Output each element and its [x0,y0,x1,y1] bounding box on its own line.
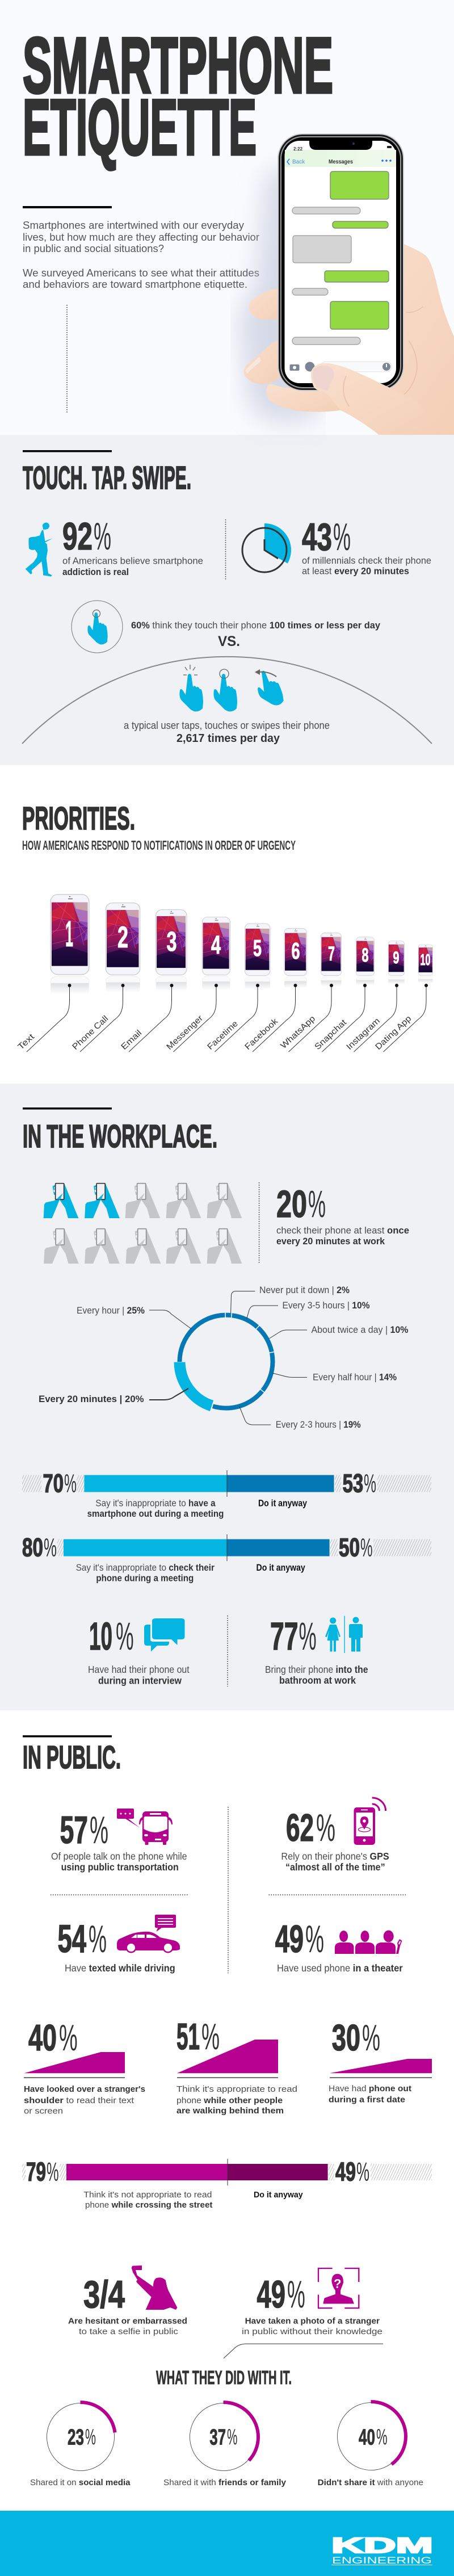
stat: 77%: 77 [270,1614,299,1658]
stat: 77%: Bring their phone into the [265,1664,368,1675]
donut label: half hour [273,1373,397,1383]
stat: 51% walking behind: 51 [176,2016,200,2057]
pictogram: 10 phone hands, 2 highlighted [44,1184,242,1264]
phone 5: facetime: Facetime [205,1019,240,1052]
phone 7: whatsapp: WhatsApp [279,1014,317,1051]
bar: crossing the street: Think it's not appropriate to read [83,2190,212,2200]
stat: 49% theater: Have used phone in a theater [277,1962,403,1974]
phone 6: facebook: Facebook [243,1016,280,1052]
stat: 51% walking behind: Think it's appropriate to read [176,2084,297,2094]
text: 60%: 60% think they touch their phone 100 times or less per day [131,620,381,631]
stat: 20% [276,1183,409,1247]
phone 4: messenger: 4 [211,930,221,959]
bar: crossing the street: 49 [335,2157,356,2187]
stat: 40% looked over shoulder: % [59,2017,78,2058]
stat: 10%: % [116,1614,134,1658]
footer [0,2511,454,2576]
bar: check their phone: % [44,1533,57,1562]
intro text: We surveyed Americans to see what their attitudes [23,267,259,279]
bar: crossing the street: 79 [26,2157,46,2187]
bar: check their phone: Do it anyway [257,1563,305,1573]
donut label: never [231,1285,350,1313]
stat: 20%: every 20 minutes at work [276,1236,385,1247]
input bar [289,362,392,372]
stat: 51% walking behind [176,2016,297,2116]
intro text: Smartphones are intertwined with our everyday [23,219,245,231]
stat: 57%: 57 [60,1809,88,1852]
icon: clock [242,523,291,572]
stat: 43%: 43 [302,515,332,559]
stat: 40% looked over shoulder [24,2017,145,2116]
bar: crossing the street: % [47,2157,59,2187]
icon: hand in circle [72,601,123,653]
stat: 10%: during an interview [98,1675,182,1686]
stat: 30% first date [329,2017,432,2105]
phone [278,133,404,391]
text: typical user: 2,617 times per day [176,732,280,745]
stat: 49% theater: 49 [275,1918,304,1961]
icon: walking person [26,523,53,577]
phone 7: whatsapp [279,933,342,1052]
stat: 30% first date: 30 [332,2017,360,2058]
stat: 54%: Have texted while driving [65,1962,175,1974]
stat: 49% theater [275,1918,403,1974]
phone 6: facebook: 6 [292,938,300,964]
stat: 92%: addiction is real [62,567,129,577]
stat: 3/4 selfie [68,2273,187,2336]
stat: 77% [265,1614,368,1686]
phone 5: facetime [205,924,270,1052]
stat: 62%: % [316,1806,335,1849]
phone 9: instagram [344,941,405,1052]
donut label: every 3-5 hours [247,1300,370,1319]
phone ranking chart [16,895,433,1052]
icon: selfie silhouette [132,2265,177,2310]
stat: 49% theater: % [305,1918,324,1961]
phone 1: text [16,895,89,1052]
stat: 49% stranger photo: 49 [257,2273,285,2316]
stat: 62%: Rely on their phone's GPS [281,1851,389,1862]
phone: Messages [329,159,353,165]
gauge: 40%: % [376,2425,388,2450]
stat: 3/4 selfie: 3/4 [83,2273,125,2316]
stat: 92%: of Americans believe smartphone [62,556,203,567]
stat: 40% looked over shoulder: shoulder to read their text [24,2096,134,2105]
bar: have a smartphone out: 53 [343,1469,363,1497]
icon: car with speech bubble [117,1915,180,1953]
gauge: 40%: 40 [359,2425,375,2450]
thumb [311,363,440,435]
bar: crossing the street [22,2157,432,2210]
stat: 51% walking behind: are walking behind them [176,2106,284,2116]
bar: check their phone: % [360,1533,373,1562]
panel: in the workplace [21,1107,431,1686]
stat: 92%: 92 [62,515,93,558]
stat: 57% [51,1809,187,1873]
icon: unknown person in frame: ? [334,2276,341,2290]
icon: bus with speech bubble [117,1809,173,1845]
donut label: every hour [77,1306,191,1329]
phone 8: snapchat: Snapchat [313,1017,349,1052]
bar: have a smartphone out [22,1469,431,1519]
phone 10: dating app [373,945,433,1052]
title: ETIQUETTE [23,83,257,171]
gauge: 23% [30,2402,131,2487]
phone 10: dating app: Dating App [373,1014,413,1052]
intro text: in public and social situations? [23,242,164,254]
text: typical user [124,720,330,745]
phone 9: instagram: 9 [393,949,400,967]
phone 2: phone call: Phone Call [70,1014,110,1052]
stat: 43%: of millennials check their phone [302,556,431,566]
phone 4: messenger: Messenger [165,1013,205,1052]
phone 3: email [119,910,187,1052]
stat: 54% [58,1917,175,1974]
phone 1: text: 1 [65,913,73,954]
panel: in public [22,1735,432,2487]
donut label: every 20 minutes [39,1388,188,1404]
phone: 2:22 [293,146,303,152]
title [23,22,333,171]
message bubbles [292,171,389,345]
donut label: every hour: Every hour | 25% [77,1306,145,1316]
gauge: 40%: Didn't share it with anyone [318,2478,423,2487]
phone: Back [292,159,305,165]
rule [23,1735,112,1737]
stat: 20%: check their phone at least once [276,1226,409,1236]
intro text: and behaviors are toward smartphone etiquette. [23,278,247,290]
bar: have a smartphone out: 70 [43,1469,64,1497]
phone 2: phone call [70,903,140,1052]
subheading: WHAT THEY DID WITH IT. [156,2367,292,2389]
stat: 10% [88,1614,190,1686]
donut label: twice a day [269,1325,409,1339]
phone 8: snapchat [313,937,375,1052]
heading: TOUCH. TAP. SWIPE. [23,460,191,496]
gauge: 37%: % [227,2425,237,2450]
finger: lower [266,384,343,412]
phone 3: email: 3 [167,927,177,957]
stat: 77%: bathroom at work [279,1675,356,1686]
dotted connector [66,305,68,414]
gauge: 37% [163,2402,286,2487]
stat: 40% looked over shoulder: 40 [28,2017,57,2058]
donut label: every 3-5 hours: Every 3-5 hours | 10% [283,1300,370,1311]
donut chart [39,1285,409,1430]
bar: crossing the street: Do it anyway [254,2190,303,2200]
bar: have a smartphone out: smartphone out during a meeting [87,1509,224,1519]
stat: 30% first date: during a first date [329,2095,405,2105]
icon: theater audience [335,1930,402,1954]
stat: 43% [302,515,431,577]
bar: check their phone: Say it's inappropriate to check their [76,1563,215,1573]
phone 8: snapchat: 8 [362,945,369,966]
icon: restroom figures [325,1616,363,1653]
donut label: never: Never put it down | 2% [259,1285,350,1295]
icon: unknown person in frame [318,2268,359,2308]
phone 3: email: Email [119,1028,144,1052]
donut label: 2-3 hours [239,1407,361,1430]
gauge: 37%: 37 [209,2425,226,2450]
logo: KDM [331,2534,433,2558]
stat: 10%: Have had their phone out [88,1664,190,1675]
stat: 62%: “almost all of the time” [285,1861,385,1873]
connector line [224,2344,383,2358]
rule [23,1107,112,1109]
donut label: half hour: Every half hour | 14% [313,1373,397,1383]
phone 2: phone call: 2 [117,921,128,954]
panel: touch tap swipe [22,450,432,745]
gauge: 40% [318,2402,423,2487]
bar: crossing the street: phone while crossing the street [85,2200,212,2210]
vs label: VS. [218,633,240,649]
finger: upper [249,288,281,320]
stat: 51% walking behind: % [201,2016,220,2057]
stat: 40% looked over shoulder: Have looked over a stranger's [24,2084,145,2094]
stat: 30% first date: Have had phone out [329,2084,411,2093]
stat: 54%: % [89,1918,107,1961]
stat: 40% looked over shoulder: or screen [24,2106,63,2116]
bar: have a smartphone out: Do it anyway [258,1499,308,1509]
stat: 62% [281,1806,389,1873]
stat: 43%: % [333,515,351,559]
phone 5: facetime: 5 [253,935,262,961]
stat: 3/4 selfie: Are hesitant or embarrassed [68,2316,187,2326]
donut label: 2-3 hours: Every 2-3 hours | 19% [276,1420,361,1430]
stat: 57%: % [90,1809,108,1852]
rule [23,206,112,208]
icon: gps phone [354,1798,386,1845]
stat: 49% stranger photo [242,2273,382,2336]
stat: 20%: 20 [276,1183,307,1226]
bar: have a smartphone out: % [64,1469,77,1497]
gauge: 23%: % [85,2425,96,2450]
donut label: twice a day: About twice a day | 10% [311,1325,409,1335]
hand behind phone [244,244,454,435]
heading: PRIORITIES. [22,800,135,837]
stat: 57%: Of people talk on the phone while [51,1851,187,1862]
notch [309,139,372,150]
gauge: 23%: 23 [68,2425,84,2450]
bar: check their phone: phone during a meeting [96,1574,194,1584]
panel: priorities [16,800,433,1052]
text: typical user: a typical user taps, touches or swipes their phone [124,720,330,731]
bar: have a smartphone out: % [364,1469,376,1497]
stat: 20%: % [308,1183,326,1226]
stat: 43%: at least every 20 minutes [302,567,409,577]
logo: ENGINEERING [332,2555,432,2566]
rule [23,450,112,452]
bar: check their phone: 80 [22,1533,43,1562]
phone 1: text: Text [16,1031,37,1052]
icon: chat bubbles [144,1618,185,1652]
phone 7: whatsapp: 7 [328,943,335,965]
bar: check their phone: 50 [339,1533,360,1562]
stat: 62%: 62 [286,1806,314,1849]
stat: 49% stranger photo: Have taken a photo of a stranger [245,2316,380,2326]
stat: 49% stranger photo: in public without their knowledge [242,2327,382,2336]
stat: 54%: 54 [58,1917,86,1961]
bar: check their phone [21,1533,431,1584]
stat: 92% [62,515,203,577]
donut label: every 20 minutes: Every 20 minutes | 20% [39,1394,144,1404]
palm [318,244,454,435]
nav bar [285,150,396,167]
gauge: 37%: Shared it with friends or family [163,2478,286,2487]
stat: 3/4 selfie: to take a selfie in public [79,2327,178,2336]
intro text: lives, but how much are they affecting our behavior [23,231,259,243]
stat: 30% first date: % [362,2017,380,2058]
bar: have a smartphone out: Say it's inappropriate to have a [95,1499,216,1509]
arc [22,657,432,744]
heading: IN PUBLIC. [23,1739,121,1776]
phone 4: messenger [165,917,230,1052]
phone 9: instagram: Instagram [344,1016,382,1052]
phone shadow [238,170,318,423]
intro text [23,219,259,290]
finger: middle [244,338,281,384]
stat: 49% stranger photo: % [287,2273,305,2316]
icons: tap touch swipe hands [179,665,285,711]
panel: hero [23,22,454,435]
phone 10: dating app: 10 [420,951,430,968]
phone 6: facebook [243,928,307,1052]
bar: crossing the street: % [356,2157,369,2187]
stat: 57%: using public transportation [61,1861,179,1873]
stat: 92%: % [94,515,111,558]
stat: 10%: 10 [89,1614,112,1658]
heading: IN THE WORKPLACE. [23,1118,217,1155]
gauge: 23%: Shared it on social media [30,2478,131,2487]
stat: 51% walking behind: phone while other people [176,2096,283,2105]
stat: 77%: % [299,1614,317,1658]
logo [331,2534,433,2566]
